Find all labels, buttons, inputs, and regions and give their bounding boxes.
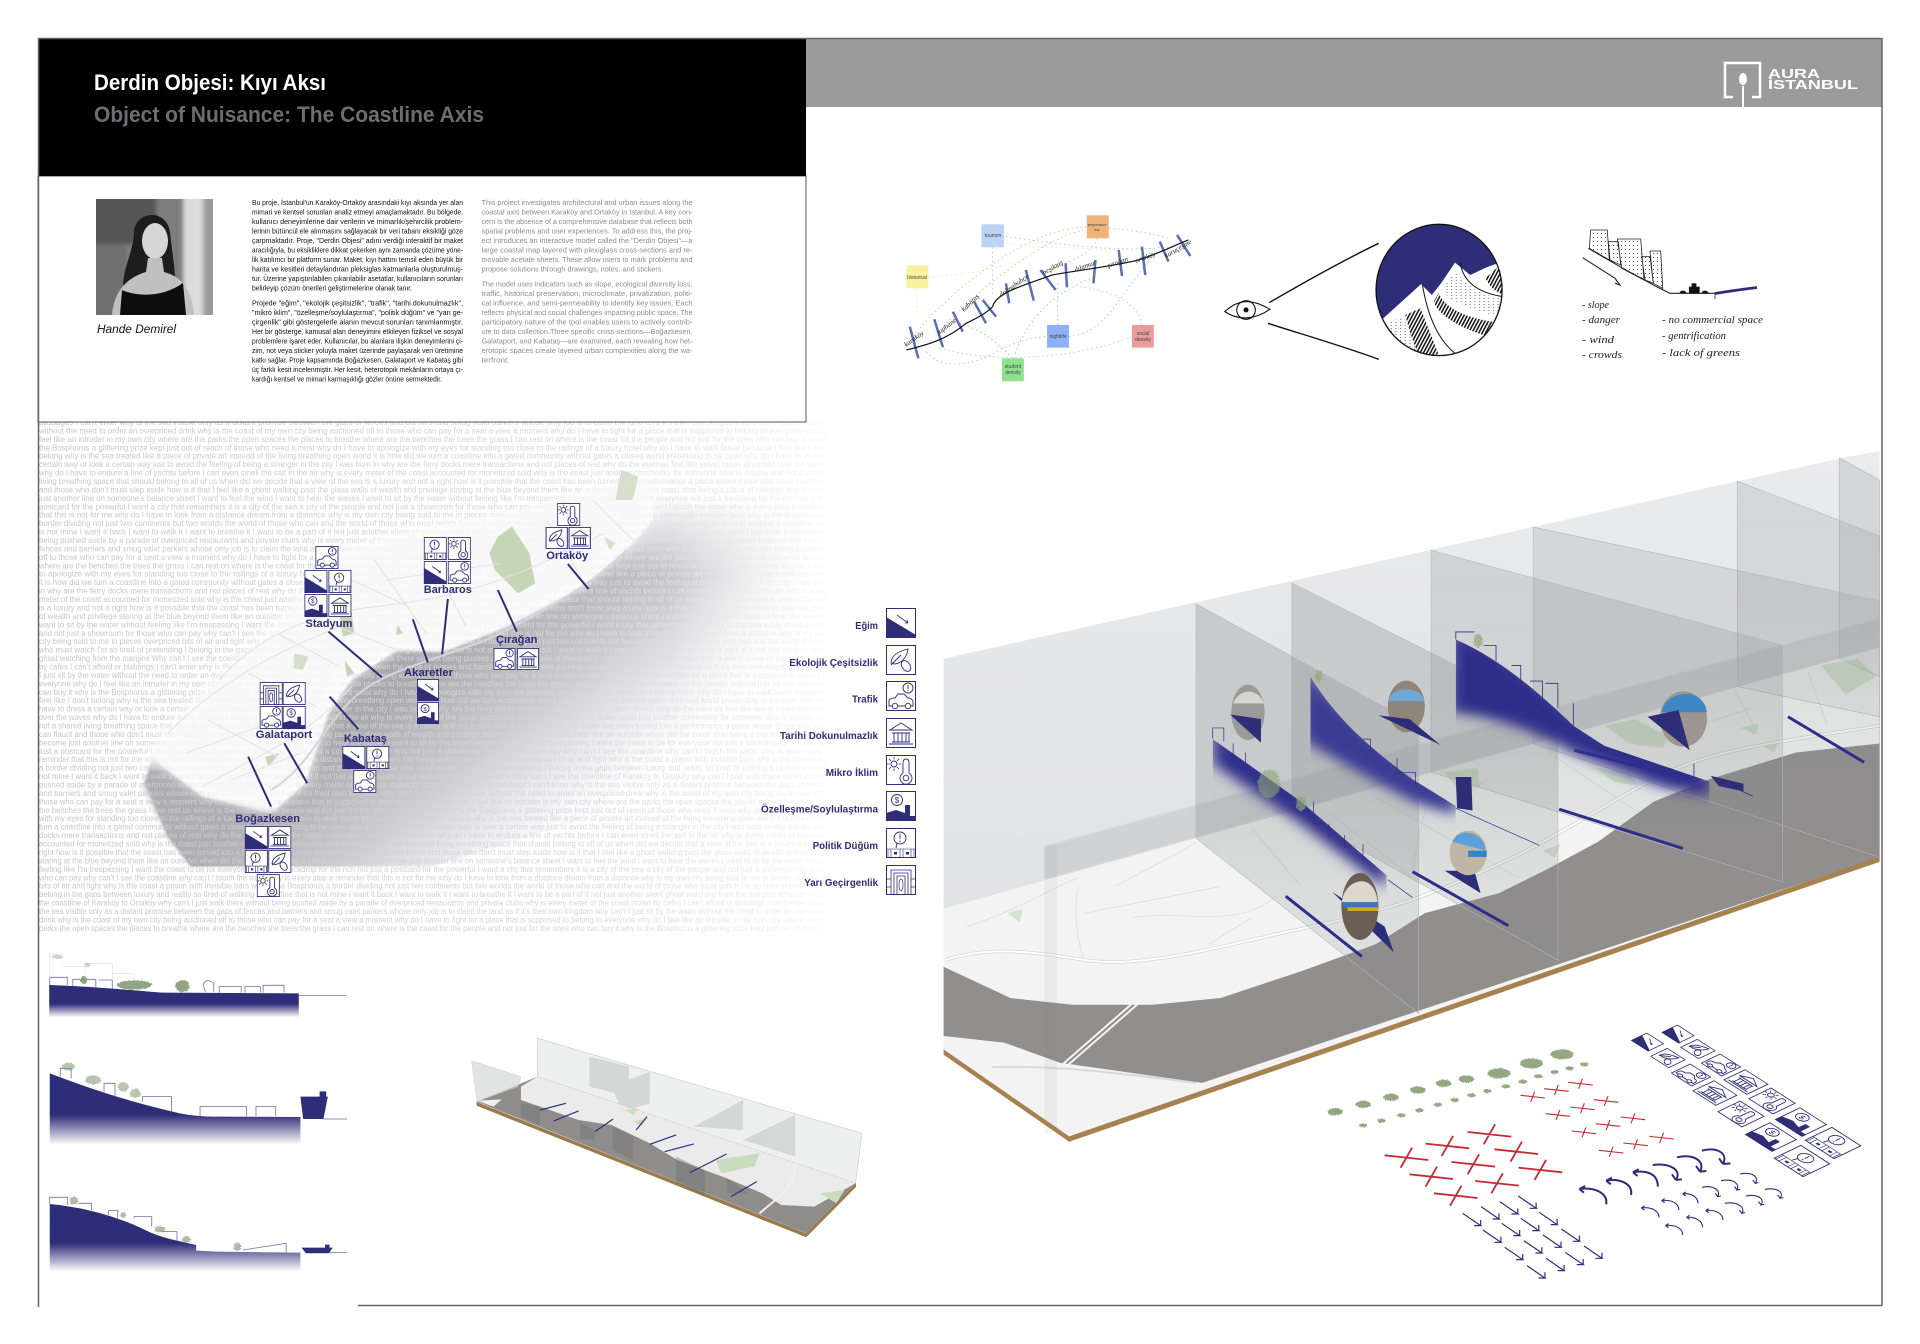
background manifesto text: ghost watching from the margins Why can't I see the coastline of Karaköy to Ortaköy why can't I just walk there without being pushed aside by a parade of overpriced restaurants and private clubs why is every meter of the coast stolen [39,654,829,663]
model: land [944,648,1880,1136]
background manifesto text: pushed aside by a parade of overpriced restaurants and private clubs why is every meter of the coast stolen by cafes I can't afford or buildings I can't enter why is the sea visible only as a distant promise between the gaps of fences [39,780,829,790]
model: photo Stadyum [1378,681,1440,745]
background manifesto text: without the need to order an overpriced drink why is the coast of my own city being auctioned off to those who can pay for a seat a view a moment why do I have to fight for a place that is supposed to belong to everyone why do [38,426,830,435]
stickers: sets [1328,1049,1783,1278]
background manifesto text: to apologize with my eyes for standing too close to the railings of a luxury hotel why do I have to walk faster because I feel like I don't belong why is the sea treated like a piece of private art instead of the living breathing open [39,570,829,579]
legend: Ekolojik Çeşitsizlik [789,646,916,674]
background manifesto text: the sea visible only as a distant promise between the gaps of fences and barriers and smug valet parkers whose only job is to claim the land as if it's their own kingdom why can't I just sit by the water without the need to order an overpriced [39,907,829,916]
background manifesto text: that this is not for me why do I have to look from a distance dream from a distance why is my own city being sold to me in pieces overpriced bits of air and light why is the coast a prison with invisible bars why is the Bosphorus a [39,511,830,520]
background manifesto text: drink why is the coast of my own city being auctioned off to those who can pay for a seat a view a moment why do I have to fight for a place that is supposed to belong to everyone why do I feel like an intruder in my own city where are the [39,915,830,924]
Turkish text: katkı sağlar. Proje kapsamında Boğazkesen, Galataport ve Kabataş gibi [252,356,463,364]
background manifesto text: a border dividing not just two continents but two worlds the world of those who can and the world of those who must watch I'm so tired of pretending I belong in the gaps between luxury and reality so tired of walking a coastline that is [39,764,829,773]
small model: front-left sheet [472,1061,521,1102]
background manifesto text: postcard for the powerful I want a city that remembers it is a city of the sea a city of the people and not just a showroom for those who can pay why can't I see the coastline why can't I touch the water why is every step a reminder [39,502,829,511]
network: handwritten place names: ortaköy [1134,250,1158,265]
network: handwritten place names: karaköy [903,329,926,349]
cluster: Akaretler [404,667,454,724]
model: section three [1450,627,1753,797]
network: coast line [906,240,1188,350]
map: cut line Çırağan [498,590,517,632]
legend: Politik Düğüm: Politik Düğüm [813,841,878,852]
legend: Politik Düğüm [813,828,916,858]
Turkish text: harita ve kesitleri detaylandıran pleksiglas katmanlarla oluşturulmuş- [252,264,464,274]
background manifesto text: why do I have to endure a line of yachts before I can even smell the salt in the air why is every meter of the coast accounted for monetized sold why is the coast just another commodity for someone else to display and not a shared [38,469,829,478]
cluster: Galataport [256,682,313,741]
sketch: handwritten notes: - gentrification [1662,331,1726,342]
Turkish text: üç farklı kesit incelenmiştir. Her kesit, heterotopik mekânların ortaya çı- [252,365,463,374]
background manifesto text: who can pay why can't I see the coastline why can't I touch the water why is every step a reminder that this is not for me why do I have to look from a distance dream from a distance why is my own city being sold to me in pieces overpriced [38,873,829,882]
model: board edge [944,856,1880,1142]
English text [482,198,693,364]
background manifesto text: of wealth and privilege staring at the blue beyond them like an outsider when did the coast stop being a place of freedom and become just another line on someone's balance sheet I want to feel the wind I want to hear the waves I [39,612,829,621]
network: node labels: density [1135,337,1151,343]
background manifesto text: fences and barriers and smug valet parkers whose only job is to claim the land as if it's their own kingdom why can't I just sit by the water without the need to order an overpriced drink why is the coast of my own city being auctioned [39,544,829,554]
cluster: Galataport: Galataport [256,729,313,741]
Turkish text: kullanıcı deneyimlerine dair verilerin ve mimarlık/şehircilik problem- [252,217,464,226]
background manifesto text: want to sit by the water without feeling like I'm trespassing I want the coast to be for everyone not just a backdrop for the rich not just a postcard for the powerful I want a city that remembers it is a city of the sea a city of the people [38,620,830,629]
sketch: handwritten notes: - wind [1582,335,1615,346]
background manifesto text: feel like an intruder in my own city where are the parks the open spaces the places to breathe where are the benches the trees the grass I can rest on where is the coast for the people and not just for the ones who can buy it why is [39,435,829,444]
cluster: Barbaros [424,537,472,596]
network: handwritten place names: kabataş [960,292,981,313]
logo: Aura İstanbul: İSTANBUL [1768,77,1858,92]
map: cut line Boğazkesen [248,757,271,807]
logo: Aura İstanbul: AURA [1768,66,1821,81]
Turkish text: Bu proje, İstanbul'un Karaköy-Ortaköy arasındaki kıyı aksında yer alan [252,198,463,207]
English text: The model uses indicators such as slope, ecological diversity loss, [482,280,692,288]
large model: coastline axis [944,451,1880,1142]
Turkish text: Projede "eğim", "ekolojik çeşitsizlik", "trafik", "tarihi dokunulmazlık", [252,298,463,308]
background manifesto text: being pushed aside by a parade of overpriced restaurants and private clubs why is every meter of the coast stolen by cafes I can't afford or buildings I can't enter why is the sea visible only as a distant promise between the gaps of [39,536,830,545]
section three: outlines [50,1197,347,1253]
Turkish text: mimari ve kentsel sorunları analiz etmeyi amaçlamaktadır. Bu bölgede, [252,208,463,216]
model: photo Akaretler [1648,691,1707,750]
background manifesto text: meter of the coast accounted for monetized sold why is the coast just another commodity for someone else to display and not a shared living breathing space that should belong to all of us when did we decide that a view of the sea [39,595,830,604]
Turkish text: lerinin bütüncül ele alınmasını sağlayacak bir veri tabanı eksikliği göze [252,226,463,236]
Turkish text: tur. Üzerine yapıştırılabilen çıkarılabilir asetatlar, kullanıcıların sorunları [252,274,463,283]
network: node labels: social [1137,331,1149,337]
Turkish text: aracılığıyla, bu eksikliklere dikkat çekerken aynı zamanda çözüme yöne- [252,246,463,254]
title: Derdin Objesi: Kıyı Aksı [94,70,326,95]
legend: Eğim: Eğim [855,621,878,632]
map: cut lines Akaretler [413,599,448,662]
network: social density node [1132,325,1154,348]
section three: terrain [50,1204,300,1272]
English text: reflects physical and social challenges impacting public space. The [482,308,692,317]
black title band [38,38,806,176]
background manifesto text: parks the open spaces the places to breathe where are the benches the trees the grass I can rest on where is the coast for the people and not just for the ones who can buy it why is the Bosphorus a glittering prize kept just out of reach of [39,924,830,933]
sketch: handwritten notes: - no commercial space [1662,315,1764,326]
background manifesto text: where are the benches the trees the grass I can rest on where is the coast for the people and not just for the ones who can buy it why is the Bosphorus a glittering prize kept just out of reach of those who need it most why do I have [38,561,830,570]
stickers: small curved arrows [1641,1173,1783,1235]
background manifesto text: not mine I want it back I want to walk it I want to breathe it I want to be a part of it not just another silent ghost watching from the margins Why can't I see the coastline of Karaköy to Ortaköy why can't I just walk there without being [39,772,829,781]
stickers: straight arrows [1463,1196,1602,1278]
stickers: small red crosses [1520,1079,1674,1157]
background manifesto text: belong why is the sea treated like a piece of private art instead of the living breathing open world it is how did we turn a coastline into a gated community without gates a closed world pretending to be open why do I have to dress a [39,452,830,461]
background manifesto text: it is how did we turn a coastline into a gated community without gates a closed world pretending to be open why do I have to dress a certain way or look a certain way just to avoid the feeling of being a stranger in the city I was born [39,578,829,587]
cluster: Kabataş [342,733,389,793]
background manifesto text: the coastline of Karaköy to Ortaköy why can't I just walk there without being pushed aside by a parade of overpriced restaurants and private clubs why is every meter of the coast stolen by cafes I can't afford or buildings I can't enter why is [39,899,829,908]
English text: participatory nature of the tool enables users to actively contrib- [482,318,693,326]
background manifesto text: I just sit by the water without the need to order an overpriced drink why is the coast of my own city being auctioned off to those who can pay for a seat a view a moment why do I have to fight for a place that is supposed to belong to [39,671,830,680]
Turkish text: lik katılımcı bir platform sunar. Maket, kıyı hattını temsil eden büyük bir [252,255,463,264]
sketch: buildings [1589,230,1663,288]
background manifesto text: accounted for monetized sold why is the coast just another commodity for someone else to display and not a shared living breathing space that should belong to all of us when did we decide that a view of the sea is a luxury and not a [39,840,830,848]
sketch: handwritten notes: - lack of greens [1662,348,1740,359]
Turkish text: zim, not veya sticker yoluyla maket üzerinde paylaşarak veri üretimine [252,346,463,355]
English text: Galataport, and Kabataş—are examined, each revealing how het- [482,336,693,346]
network: handwritten place names: kuruçeşme [1163,238,1193,260]
section two: trees [62,1063,141,1098]
legend: Mikro İklim [826,756,916,784]
network: nightlife node [1047,325,1069,348]
stickers: indicator tiles [1631,1025,1861,1177]
map: cut line Stadyum [328,632,382,677]
coastline map [139,470,656,813]
legend: Tarihi Dokunulmazlık: Tarihi Dokunulmazlık [780,731,878,742]
background manifesto text: border dividing not just two continents but two worlds the world of those who can and the world of those who must watch I'm so tired of pretending I belong in the gaps between luxury and reality so tired of walking a coastline that [39,519,830,528]
Turkish text: belirleyip çözüm önerileri geliştirmelerine olanak tanır. [252,284,412,292]
section one: trees [52,955,190,992]
sketch: eye looking at seascape circle [1225,220,1510,359]
network: temperature node [1087,215,1109,238]
logo: Aura İstanbul [1725,63,1858,107]
network: node labels: tourism [985,233,1001,239]
map: cut line Ortaköy [568,564,589,589]
Turkish text: kardığı kentsel ve mimari karmaşıklığı gözler önüne sermektedir. [252,374,442,384]
section drawing two [50,1063,347,1145]
stickers: bushes [1328,1049,1589,1127]
background manifesto text: just a postcard for the powerful I want a city that remembers it is a city of the sea a city of the people and not just a showroom for those who can pay why can't I see the coastline why can't I touch the water why is every step a [38,747,830,756]
map: streets [168,500,633,790]
background manifesto text: reminder that this is not for me why do I have to look from a distance dream from a distance why is my own city being sold to me in pieces overpriced bits of air and light why is the coast a prison with invisible bars why is the Bosphorus [39,755,829,764]
small model view [472,1038,862,1237]
background manifesto text: the benches the trees the grass I can rest on where is the coast for the people and not just for the ones who can buy it why is the Bosphorus a glittering prize kept just out of reach of those who need it most why do I have to apologize [39,806,830,815]
small model: sea [477,1077,855,1233]
Turkish text: "mikro iklim", "özelleşme/soylulaştırma", "politik düğüm" ve "yarı ge- [252,308,464,317]
background manifesto text: docks mere transactions and not places of rest why do the marinas feel like velvet ropes stretched over the waves why do I have to endure a line of yachts before I can even smell the salt in the air why is every meter of the coast [39,831,830,840]
English text: movable acetate sheets. These allow users to mark problems and [482,255,692,264]
model: left translucent sheet [1044,844,1057,1134]
small model: cut lines [540,1103,757,1197]
legend: Ekolojik Çeşitsizlik: Ekolojik Çeşitsizlik [789,658,878,669]
legend: Özelleşme/Soylulaştırma: Özelleşme/Soylulaştırma [761,802,878,816]
sketch: slope section with notes [1582,230,1764,361]
English text: terfront. [482,356,510,364]
background manifesto text: in why are the ferry docks mere transactions and not places of rest why do the marinas feel like velvet ropes stretched over the waves why do I have to endure a line of yachts before I can even smell the salt in the air why is every [39,587,829,596]
background manifesto text: feeling like I'm trespassing I want the coast to be for everyone not just a backdrop for the rich not just a postcard for the powerful I want a city that remembers it is a city of the sea a city of the people and not just a showroom for those [39,865,830,874]
background manifesto text: turn a coastline into a gated community without gates a closed world pretending to be open why do I have to dress a certain way or look a certain way just to avoid the feeling of being a stranger in the city I was born in why are the ferry [39,823,829,832]
section two: terrain [50,1073,300,1145]
sight lines [1268,243,1379,359]
background manifesto text: is a luxury and not a right how is it possible that the coast has been turned into a performance a place where those who have can flaunt and those who don't must step aside how is it that I feel like a ghost walking past the glass [39,604,829,612]
grey header band [806,38,1882,107]
model: parks [1007,659,1876,922]
portrait photo [96,199,213,315]
section three: boat [302,1245,333,1253]
background manifesto text: and barriers and smug valet parkers whose only job is to claim the land as if it's their own kingdom why can't I just sit by the water without the need to order an overpriced drink why is the coast of my own city being auctioned off to [39,789,830,798]
English text: ute to data collection.Three specific cross-sections—Boğazkesen, [482,327,692,336]
background manifesto text: is not mine I want it back I want to walk it I want to breathe it I want to be a part of it not just another silent ghost watching from the margins Why can't I see the coastline of Karaköy to Ortaköy why can't I just walk there without [39,528,830,537]
section two: ship [300,1091,328,1119]
sketch: handwritten notes: - slope [1582,300,1610,311]
background manifesto text: by cafes I can't afford or buildings I can't enter why is the sea visible only as a distant promise between the gaps of fences and barriers and smug valet parkers whose only job is to claim the land as if it's their own kingdom why can't [39,662,830,672]
background manifesto text: who must watch I'm so tired of pretending I belong in the gaps between luxury and reality so tired of walking a coastline that is not mine I want it back I want to walk it I want to breathe it I want to be a part of it not just another silent [38,646,830,655]
model: cross sheets [1196,458,1880,1014]
cluster: Çırağan [494,634,539,670]
Turkish text: çirgenlik" gibi göstergelerle alanın mevcut sorunları tanımlanmıştır. [252,318,463,326]
background manifesto text: can flaunt and those who don't must step aside how is it that I feel like a ghost walking past the glass walls of wealth and privilege staring at the blue beyond them like an outsider when did the coast stop being a place of freedom and [39,730,829,739]
sketch: slope [1583,248,1715,293]
stickers: large red crosses [1385,1124,1562,1206]
legend: Yarı Geçirgenlik: Yarı Geçirgenlik [804,878,878,889]
network: student density node [1002,358,1024,381]
white intro panel [38,176,806,422]
map: cut line Kabataş [330,697,358,729]
title: Object of Nuisance: The Coastline Axis [94,102,484,127]
English text: ect introduces an interactive model called the "Derdin Objesi"—a [482,236,693,245]
legend: Tarihi Dokunulmazlık [780,718,916,748]
English text: erotopic spaces create layered urban complexities along the wa- [482,346,693,355]
background manifesto text: those who can pay for a seat a view a moment why do I have to fight for a place that is supposed to belong to everyone why do I feel like an intruder in my own city where are the parks the open spaces the places to breathe where are [39,797,830,806]
background manifesto text: belong in the gaps between luxury and reality so tired of walking a coastline that is not mine I want it back I want to walk it I want to breathe it I want to be a part of it not just another silent ghost watching from the margins Why can't I see [39,890,830,899]
English text: cern is the absence of a comprehensive database that reflects both [482,217,692,226]
section drawing three [50,1197,347,1272]
Turkish text: problemlere işaret eder. Kullanıcılar, bu alanlara ilişkin deneyimlerini çi- [252,336,463,346]
cluster: Stadyum: Stadyum [305,618,353,630]
cluster: Ortaköy [546,503,590,562]
background manifesto text [38,418,830,933]
background manifesto text: can buy it why is the Bosphorus a glittering prize kept just out of reach of those who need it most why do I have to apologize with my eyes for standing too close to the railings of a luxury hotel why do I have to walk faster because I [39,688,829,697]
English text: traffic, historical preservation, microclimate, privatization, politi- [482,289,693,298]
network: dashed links [917,227,1172,364]
background manifesto text: with my eyes for standing too close to the railings of a luxury hotel why do I have to walk faster because I feel like I don't belong why is the sea treated like a piece of private art instead of the living breathing open world it is how did we [38,814,830,823]
model: wall lower band [1044,619,1880,880]
seascape circle [1376,225,1502,355]
cluster: Boğazkesen [235,813,300,897]
background manifesto text: and not just a showroom for those who can pay why can't I see the coastline why can't I touch the water why is every step a reminder that this is not for me why do I have to look from a distance dream from a distance why is my own [39,629,829,638]
model: section one [1213,726,1413,898]
network: handwritten place names: ıhlamur [1073,259,1097,274]
background manifesto text: over the waves why do I have to endure a line of yachts before I can even smell the salt in the air why is every meter of the coast accounted for monetized sold why is the coast just another commodity for someone else to display and [39,713,829,722]
model: section two [1301,663,1539,845]
small model: back wall [537,1038,862,1183]
sketch: ship [1680,284,1708,293]
background manifesto text: everyone why do I feel like an intruder in my own city where are the parks the open spaces the places to breathe where are the benches the trees the grass I can rest on where is the coast for the people and not just for the ones who [39,679,830,688]
model: cut lines on board [1286,717,1864,956]
diagram: stakeholder network sketch [903,215,1193,381]
network: node labels: student [1005,364,1022,370]
map: land [139,470,656,813]
background manifesto text: city being sold to me in pieces overpriced bits of air and light why is the coast a prison with invisible bars why is the Bosphorus a border dividing not just two continents but two worlds the world of those who can and the world of those [39,637,830,646]
network: node labels: nightlife [1049,334,1067,340]
English text: propose solutions through drawings, notes, and stickers. [482,264,664,274]
small model: inner sheets [589,1057,795,1157]
network: handwritten place names: tophane [935,316,958,337]
English text: spatial problems and user experiences. To address this, the proj- [482,226,693,236]
cluster: Kabataş: Kabataş [344,733,387,745]
model: bridge [1057,980,1165,1069]
network: handwritten place names: çırağan [1106,255,1130,270]
legend: Eğim [855,608,916,638]
Turkish text: Her bir gösterge, kamusal alan deneyimini etkileyen fiziksel ve sosyal [252,327,463,336]
English text: This project investigates architectural and urban issues along the [482,198,692,207]
title [94,70,484,127]
background manifesto text: just another line on someone's balance sheet I want to feel the wind I want to hear the waves I want to sit by the water without feeling like I'm trespassing I want the coast to be for everyone not just a backdrop for the rich not just a [38,494,830,503]
English text: cal influence, and semi-permeability to identify key issues. Each [482,298,692,308]
Turkish text [252,198,464,384]
stickers: large curved arrows [1579,1149,1731,1204]
small model: sheets on sea [521,1103,749,1197]
legend: Trafik [852,682,916,710]
cluster: Ortaköy: Ortaköy [546,550,589,562]
background manifesto text: the Bosphorus a glittering prize kept just out of reach of those who need it most why do I have to apologize with my eyes for standing too close to the railings of a luxury hotel why do I have to walk faster because I feel like I don't [39,443,830,452]
eye [1225,301,1270,319]
network: tourism node [981,224,1004,247]
small model: board edge [477,1103,855,1237]
cluster: Akaretler: Akaretler [404,667,454,679]
model: sea [944,744,1880,1083]
model: photo Galataport [1332,873,1394,952]
model: photo Boğazkesen [1230,685,1265,743]
network: node labels: rise [1094,228,1100,232]
background manifesto text: become just another line on someone's balance sheet I want to feel the wind I want to hear the waves I want to sit by the water without feeling like I'm trespassing I want the coast to be for everyone not just a backdrop for the rich not [39,738,830,747]
section three: trees [69,1197,241,1251]
legend: Özelleşme/Soylulaştırma [761,792,916,821]
network: node labels: historical [907,275,927,281]
section drawing one [49,954,346,1017]
network: historical node [906,265,928,288]
small model: parks [625,1108,845,1203]
background manifesto text: living breathing space that should belong to all of us when did we decide that a view of the sea is a luxury and not a right how is it possible that the coast has been turned into a performance a place where those who have can flaunt [39,477,830,486]
photo caption: Hande Demirel [97,322,176,336]
network: ticks across coast [910,235,1190,358]
sketch: water [1715,288,1757,294]
model: main coastal road [945,726,1880,1083]
section two: outlines [60,1068,347,1119]
map: sea [140,506,772,868]
background manifesto text: passages I can't enter why is the sea visible only as a distant promise between the gaps of fences and barriers and smug valet parkers whose only job is to claim the land as if it's their own kingdom why can't I just sit by the [39,418,830,427]
model: photo Kabataş [1445,831,1487,893]
sketch: handwritten notes [1582,300,1764,361]
English text: coastal axis between Karaköy and Ortaköy in Istanbul. A key con- [482,208,693,216]
cluster: Stadyum [304,546,353,630]
section one: terrain [49,985,299,1017]
background manifesto text: and those who don't must step aside how is it that I feel like a ghost walking past the glass walls of wealth and privilege staring at the blue beyond them like an outsider when did the coast stop being a place of freedom and become [39,485,830,494]
legend: Yarı Geçirgenlik [804,866,916,895]
background manifesto text: bits of air and light why is the coast a prison with invisible bars why is the Bosphorus a border dividing not just two continents but two worlds the world of those who can and the world of those who must watch I'm so tired of pretending I [39,882,829,891]
legend: Mikro İklim: Mikro İklim [826,766,878,779]
background manifesto text: right how is it possible that the coast has been turned into a performance a place where those who have can flaunt and those who don't must step aside how is it that I feel like a ghost walking past the glass walls of wealth and privilege [39,848,830,857]
legend: Trafik: Trafik [852,694,878,706]
network: node labels [907,223,1151,376]
map: cut line Galataport [284,743,307,783]
cluster: Çırağan: Çırağan [496,634,538,646]
sketch: handwritten notes: - crowds [1582,350,1622,361]
section one: upper faint buildings [50,954,134,982]
cluster: Boğazkesen: Boğazkesen [235,813,300,825]
network: node labels: density [1005,370,1021,376]
network: handwritten place names: dolmabahçe [998,272,1030,299]
legend [761,608,916,895]
background manifesto text: feel like I don't belong why is the sea treated like a piece of private art instead of the living breathing open world it is how did we turn a coastline into a gated community without gates a closed world pretending to be open why do I [39,696,829,705]
Turkish text: çarpmaktadır. Proje, "Derdin Objesi" adını verdiği interaktif bir maket [252,236,463,245]
network: handwritten place names [903,238,1193,349]
section one: outlines [50,977,346,996]
English text: large coastal map layered with plexiglass cross-sections and re- [482,246,693,254]
small model: land [521,1077,855,1207]
sketch: handwritten notes: - danger [1582,315,1620,326]
network: handwritten place names: beşiktaş [1041,258,1065,277]
background manifesto text: have to dress a certain way or look a certain way just to avoid the feeling of being a stranger in the city I was born in why are the ferry docks mere transactions and not places of rest why do the marinas feel like velvet ropes stretched [39,705,829,714]
background manifesto text: certain way or look a certain way just to avoid the feeling of being a stranger in the city I was born in why are the ferry docks mere transactions and not places of rest why do the marinas feel like velvet ropes stretched over the waves [39,460,829,469]
background manifesto text: staring at the blue beyond them like an outsider when did the coast stop being a place of freedom and become just another line on someone's balance sheet I want to feel the wind I want to hear the waves I want to sit by the water without [39,856,830,865]
background manifesto text: off to those who can pay for a seat a view a moment why do I have to fight for a place that is supposed to belong to everyone why do I feel like an intruder in my own city where are the parks the open spaces the places to breathe [39,553,830,562]
model: streets [967,672,1827,962]
network: node labels: temperature [1088,223,1106,227]
cluster: Barbaros: Barbaros [424,584,472,596]
small model: bridge [760,1163,795,1213]
map: parks [265,470,638,767]
background manifesto text: not a shared living breathing space that should belong to all of us when did we decide that a view of the sea is a luxury and not a right how is it possible that the coast has been turned into a performance a place where those who have [39,722,830,730]
model: back wall [944,451,1880,909]
